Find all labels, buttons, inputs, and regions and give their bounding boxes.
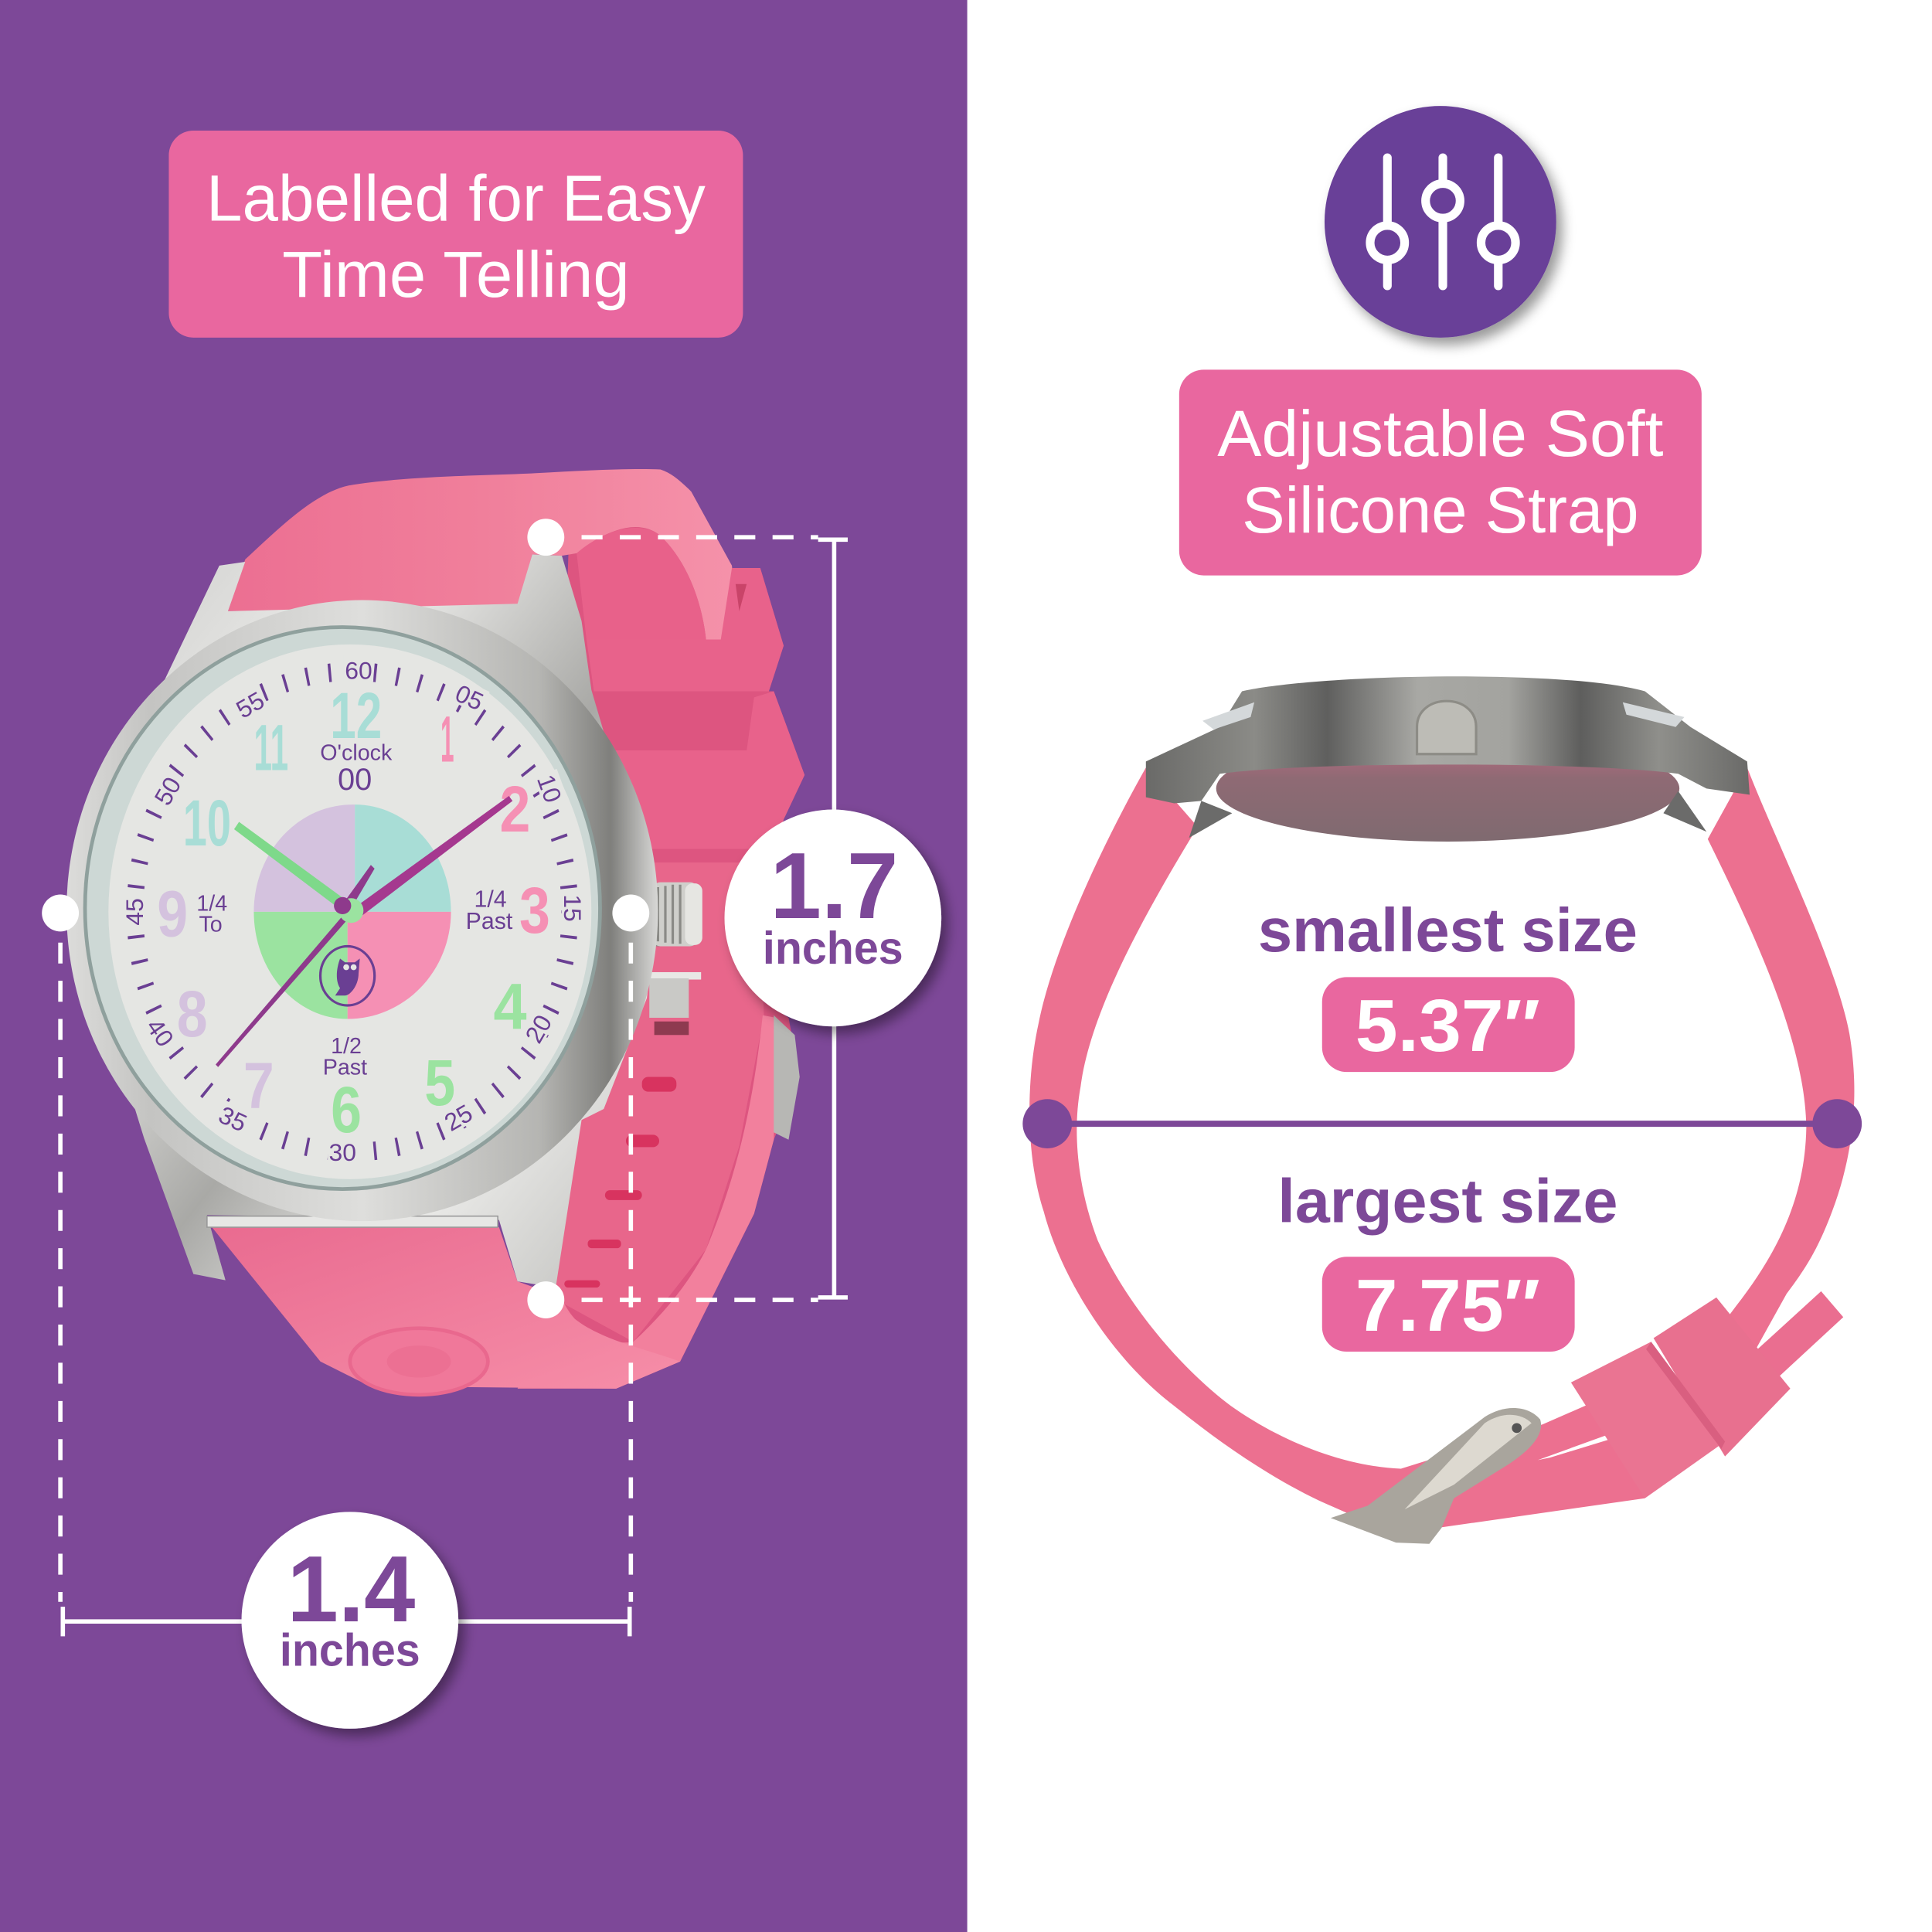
label: smallest size: smallest size [1258, 896, 1638, 964]
heading: adjustable soft silicone strap: Silicone Strap [1242, 474, 1639, 546]
crown [636, 883, 702, 946]
dial labels: To [199, 912, 223, 937]
dial labels: 1/4 [196, 891, 227, 916]
minute numerals: 20 [519, 1010, 557, 1048]
strap keeper lower [601, 691, 804, 849]
callout: 1.4 inches: inches [280, 1625, 420, 1676]
minute numerals [121, 655, 587, 1166]
case back [1216, 736, 1679, 842]
strap keeper upper [587, 568, 784, 691]
side crown [1417, 701, 1476, 754]
minute ticks [135, 672, 570, 1152]
callout: 1.7 inches [725, 810, 941, 1026]
heading: adjustable soft silicone strap [1179, 369, 1702, 576]
hour numerals [157, 679, 550, 1146]
buckle parts [649, 972, 701, 1035]
hour numerals: 11 [253, 711, 288, 784]
icon: owl logo [321, 946, 375, 1005]
hour numerals: 6 [331, 1073, 362, 1146]
lower strap inner [554, 862, 764, 1342]
strap tail [1737, 1291, 1843, 1393]
size measure line [1022, 1099, 1862, 1148]
badge: 7.75 inches [1322, 1257, 1575, 1352]
heading: labelled for easy time telling [168, 131, 743, 338]
minute numerals: 25 [440, 1099, 478, 1137]
width dimension marker [42, 895, 649, 1636]
buckle side bar [774, 1015, 800, 1140]
buckle [1331, 1408, 1541, 1544]
minute numerals: 15 [559, 894, 587, 922]
dial [108, 645, 591, 1179]
dial labels: 1/2 [331, 1034, 362, 1059]
glass ring [85, 628, 600, 1189]
hour numerals: 9 [157, 878, 188, 951]
strap emblem [350, 1328, 488, 1395]
hour numerals: 10 [183, 787, 231, 859]
watch hands [216, 796, 512, 1067]
gap between strap layers [1538, 1429, 1627, 1460]
hour numerals: 1 [440, 702, 454, 775]
keeper inset [736, 584, 747, 611]
lens edges [1202, 702, 1685, 730]
purple background panel [0, 0, 968, 1932]
minute numerals: 35 [215, 1100, 251, 1138]
bottom strap [212, 1227, 680, 1389]
strap holes [564, 1077, 676, 1287]
icon: sliders [1325, 106, 1556, 338]
heading: labelled for easy time telling: Labelled for Easy [206, 162, 706, 234]
hour numerals: 5 [424, 1046, 455, 1119]
hour numerals: 7 [243, 1049, 274, 1121]
hour numerals: 2 [500, 773, 530, 845]
case and lugs [74, 554, 657, 1287]
minute numerals: 10 [532, 771, 567, 806]
dial labels: Past [323, 1055, 367, 1080]
strap left arm and lower band [1029, 767, 1645, 1534]
height dimension marker [527, 519, 848, 1318]
label: largest size: largest size [1277, 1167, 1617, 1236]
hour numerals: 8 [177, 978, 208, 1050]
spring bar [207, 1216, 498, 1227]
minute numerals: 30 [329, 1138, 356, 1166]
back strap silhouette [543, 487, 804, 1389]
lug shadows [1189, 791, 1706, 838]
minute numerals: 40 [141, 1013, 179, 1052]
side view wristwatch [1029, 676, 1854, 1544]
dial labels: 00 [338, 763, 372, 797]
callout: 1.7 inches: inches [763, 923, 903, 974]
heading: labelled for easy time telling: Time Telling [282, 238, 630, 311]
top strap [228, 469, 740, 641]
dial labels: Past [466, 909, 513, 934]
steel case [1146, 676, 1750, 804]
callout: 1.4 inches: 1.4 [287, 1536, 415, 1641]
minute numerals: 05 [451, 679, 488, 716]
minute numerals: 60 [345, 657, 372, 685]
hour numerals: 4 [494, 970, 527, 1043]
dial labels [196, 741, 513, 1080]
dial centre quarters [253, 804, 451, 1019]
minute numerals: 45 [121, 898, 148, 926]
heading: adjustable soft silicone strap: Adjustable Soft [1217, 397, 1663, 470]
strap keepers [1571, 1298, 1791, 1498]
hour numerals: 3 [519, 874, 550, 947]
minute numerals: 55 [231, 686, 269, 724]
dial labels: O'clock [320, 741, 393, 766]
dial labels: 1/4 [474, 886, 507, 912]
minute numerals: 50 [149, 772, 186, 810]
hour numerals: 12 [330, 679, 382, 752]
strap right arm [1708, 767, 1854, 1349]
badge: 5.37 inches [1322, 977, 1575, 1072]
strap outer rim [518, 1015, 776, 1389]
callout: 1.4 inches [241, 1512, 458, 1729]
strap inner loop [577, 528, 706, 639]
callout: 1.7 inches: 1.7 [770, 833, 898, 938]
badge: 7.75 inches: 7.75″ [1355, 1264, 1540, 1347]
badge: 5.37 inches: 5.37″ [1355, 985, 1540, 1067]
front view wristwatch [66, 469, 804, 1395]
bezel [66, 600, 658, 1221]
